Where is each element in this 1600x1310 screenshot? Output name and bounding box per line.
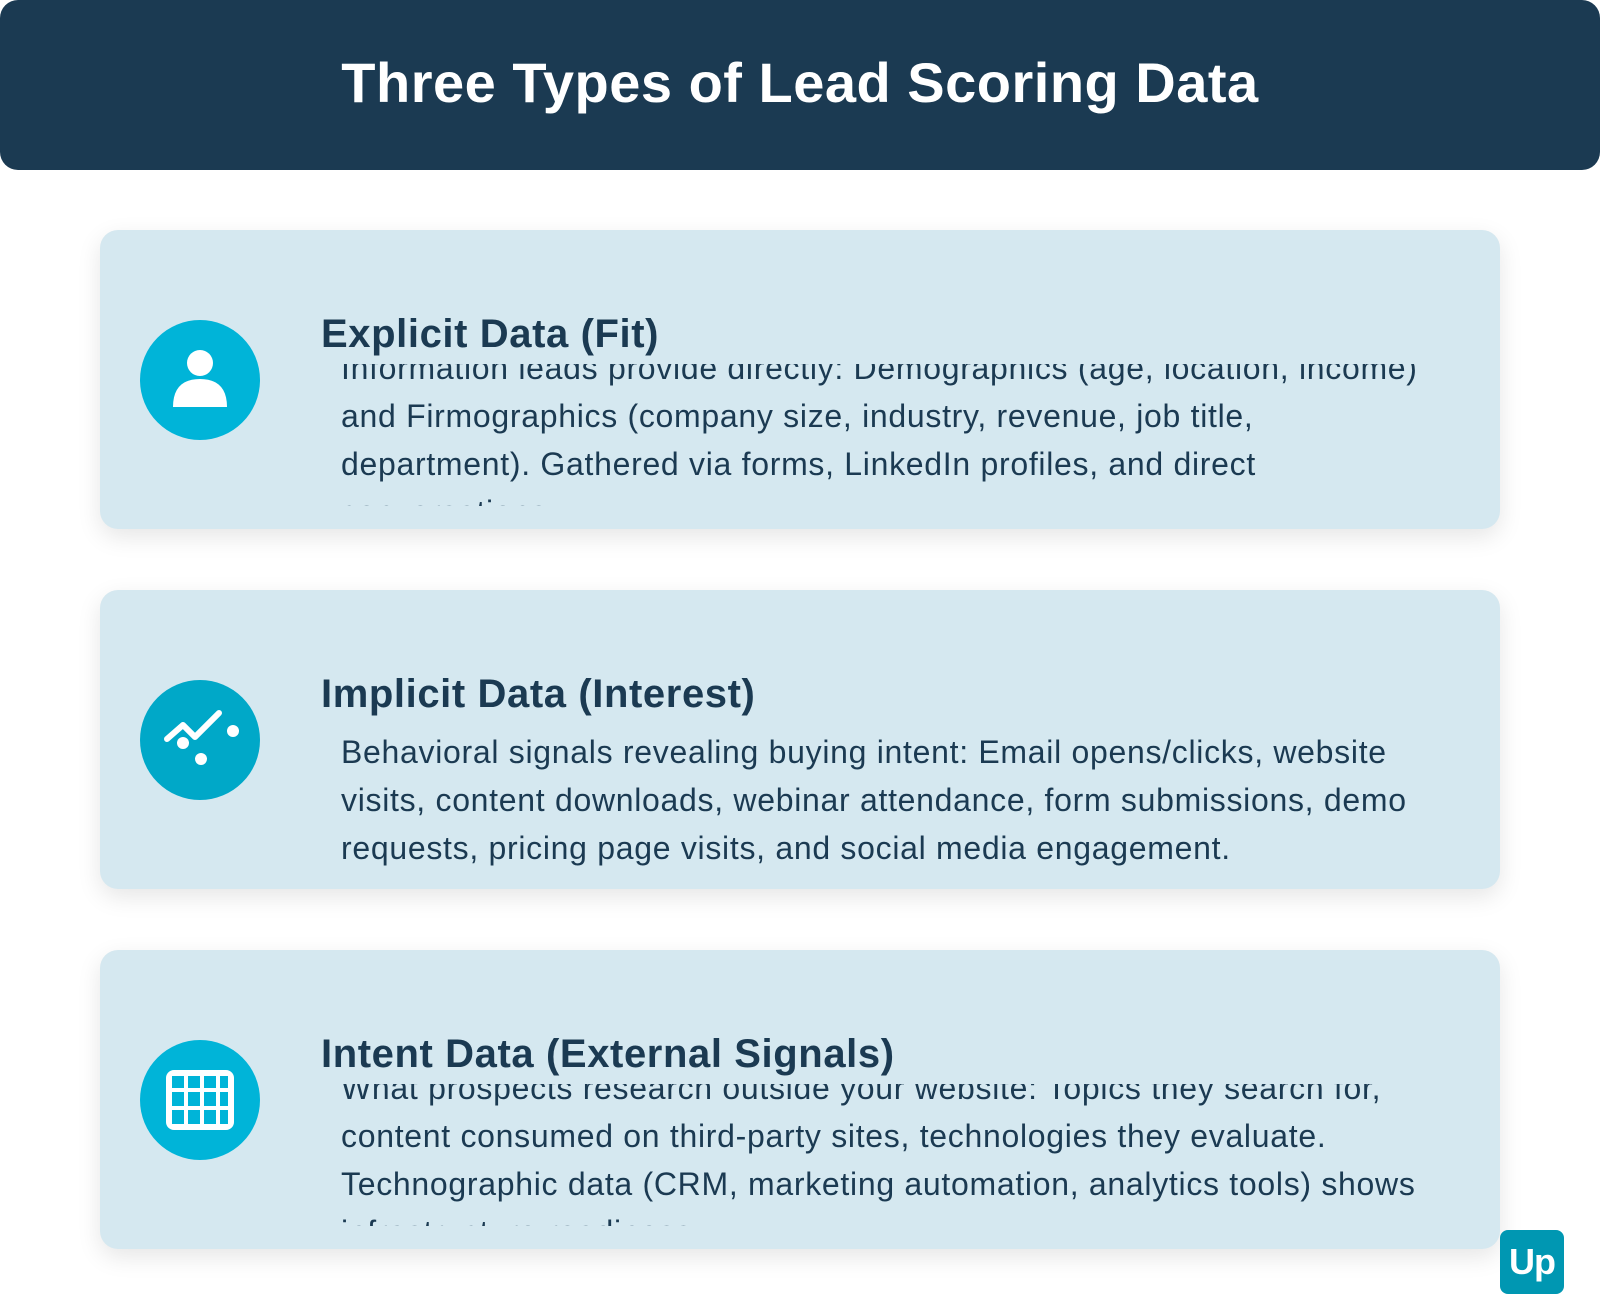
text: intent [341,1084,1416,1226]
panel: implicit data [100,590,1500,889]
text: explicit [341,364,1418,506]
text: implicit: visits, content downloads, webinar attendance, form submissions, demo [341,782,1407,818]
panel: explicit data [100,230,1500,529]
panel: intent data [100,950,1500,1249]
icon: trend [140,680,260,800]
text: intent: Technographic data (CRM, marketing automation, analytics tools) shows [341,1166,1416,1202]
heading: intent: Intent Data (External Signals) [321,1032,895,1076]
text: intent: content consumed on third-party sites, technologies they evaluate. [341,1118,1326,1154]
title: Three Types of Lead Scoring Data [341,50,1259,114]
text: implicit: Behavioral signals revealing buying intent: Email opens/clicks, website [341,734,1387,770]
heading: implicit: Implicit Data (Interest) [321,672,755,716]
text: explicit: department). Gathered via forms, LinkedIn profiles, and direct [341,446,1256,482]
header [0,0,1600,170]
text: implicit: requests, pricing page visits, and social media engagement. [341,830,1231,866]
logo: Up [1509,1241,1555,1282]
logo [1500,1230,1564,1294]
text: implicit [341,734,1407,866]
text: explicit: and Firmographics (company size, industry, revenue, job title, [341,398,1254,434]
heading: explicit: Explicit Data (Fit) [321,312,659,356]
icon: grid [140,1040,260,1160]
icon: person [140,320,260,440]
